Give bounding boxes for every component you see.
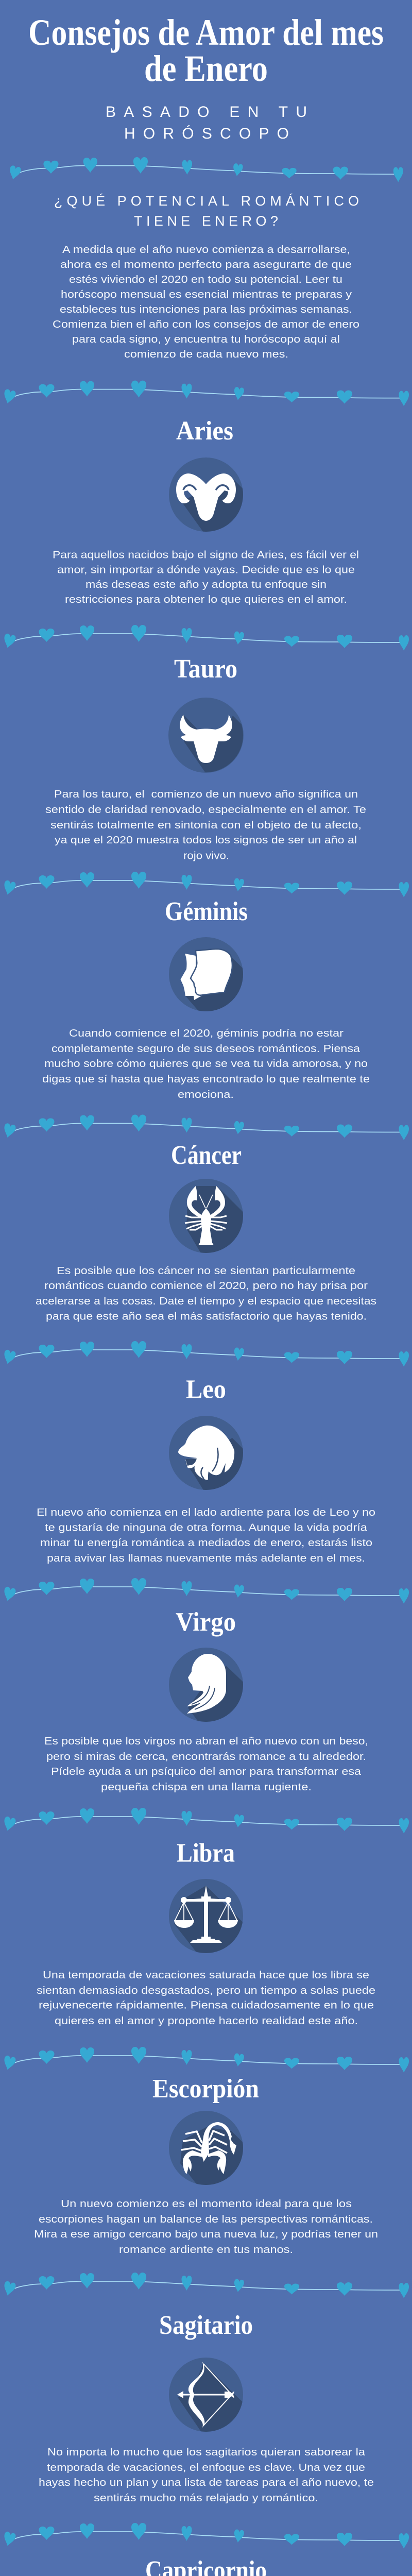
text block: Sagitario: temporada de vacaciones, el enfoque es clave. Una vez que xyxy=(47,2462,365,2473)
text block: Cáncer: acelerarse a las cosas. Date el tiempo y el espacio que necesitas xyxy=(36,1296,376,1307)
text block: Cáncer: románticos cuando comience el 2020, pero no hay prisa por xyxy=(44,1280,368,1292)
heading: Escorpión: Escorpión xyxy=(152,2074,259,2104)
text block: Tauro xyxy=(45,789,366,861)
divider: hearts xyxy=(2,2273,409,2298)
heading: Cáncer: Cáncer xyxy=(171,1141,242,1170)
text block: Aries: más deseas este año y adopta tu enfoque sin xyxy=(85,579,327,590)
divider: hearts xyxy=(2,1578,409,1604)
icon: scorpion xyxy=(169,2111,243,2185)
subtitle: HORÓSCOPO xyxy=(124,125,289,142)
heading: romantic potential xyxy=(54,193,359,229)
icon: ram xyxy=(169,457,243,532)
divider: hearts xyxy=(2,2047,409,2073)
text block: Escorpión xyxy=(34,2198,378,2256)
icon: bow and arrow xyxy=(169,2358,243,2432)
text block: Géminis xyxy=(42,1028,370,1100)
text block: Tauro: Para los tauro, el comienzo de un nuevo año significa un xyxy=(54,789,358,800)
heading: Tauro: Tauro xyxy=(174,654,237,684)
text block: introduction: Comienza bien el año con los consejos de amor de enero xyxy=(53,319,359,330)
panel: Virgo xyxy=(44,1607,368,1793)
text block: Cáncer: para que este año sea el más satisfactorio que hayas tenido. xyxy=(46,1311,367,1322)
divider: hearts xyxy=(2,2523,409,2549)
text block: Libra: Una temporada de vacaciones saturada hace que los libra se xyxy=(43,1970,369,1981)
text block: Tauro: ya que el 2020 muestra todos los signos de ser un año al xyxy=(55,835,357,846)
text block: Tauro: sentirás totalmente en sintonía con el objeto de tu afecto, xyxy=(50,820,362,831)
icon: lion xyxy=(169,1416,243,1490)
title: de Enero xyxy=(144,48,268,89)
text block: Sagitario: No importa lo mucho que los sagitarios quieran saborear la xyxy=(47,2447,366,2458)
text block: introduction: ahora es el momento perfecto para asegurarte de que xyxy=(60,259,352,270)
text block: Virgo: Pídele ayuda a un psíquico del amor para transformar esa xyxy=(51,1766,362,1777)
panel: introduction xyxy=(53,193,359,360)
icon: woman profile xyxy=(169,1648,243,1722)
divider: hearts xyxy=(2,1341,409,1367)
text block: Libra: rejuvenecerte rápidamente. Piensa cuidadosamente en lo que xyxy=(39,2000,374,2011)
text block: Géminis: mucho sobre cómo quieres que se vea tu vida amorosa, y no xyxy=(44,1058,368,1070)
text block: Aries: Para aquellos nacidos bajo el signo de Aries, es fácil ver el xyxy=(53,549,359,561)
heading: romantic potential: TIENE ENERO? xyxy=(134,213,278,229)
text block: Virgo: pero si miras de cerca, encontrarás romance a tu alrededor. xyxy=(46,1751,366,1762)
text block: introduction: estés viviendo el 2020 en todo su potencial. Leer tu xyxy=(69,274,342,285)
text block: introduction: A medida que el año nuevo comienza a desarrollarse, xyxy=(62,244,350,256)
heading: Leo: Leo xyxy=(186,1375,226,1404)
text block: Leo: minar tu energía romántica a mediados de enero, estarás listo xyxy=(40,1537,372,1549)
text block: Virgo: Es posible que los virgos no abran el año nuevo con un beso, xyxy=(44,1736,368,1747)
text block: Leo: El nuevo año comienza en el lado ardiente para los de Leo y no xyxy=(37,1507,375,1518)
text block: Virgo xyxy=(44,1736,368,1793)
text block: Escorpión: romance ardiente en tus manos. xyxy=(119,2244,293,2256)
panel: Escorpión xyxy=(34,2074,378,2256)
text block: Géminis: Cuando comience el 2020, géminis podría no estar xyxy=(69,1028,344,1039)
icon: bull xyxy=(168,698,244,773)
heading: Géminis: Géminis xyxy=(165,897,248,926)
panel: Géminis xyxy=(42,897,370,1100)
heading: Virgo: Virgo xyxy=(176,1607,236,1637)
heading: Aries: Aries xyxy=(176,416,233,446)
divider: hearts xyxy=(2,625,409,651)
text block: introduction: horóscopo mensual es esencial mientras te preparas y xyxy=(61,289,352,300)
divider: hearts xyxy=(2,1115,409,1141)
heading: romantic potential: ¿QUÉ POTENCIAL ROMÁNTICO xyxy=(54,193,359,209)
text block: introduction: comienzo de cada nuevo mes. xyxy=(124,349,288,360)
divider: hearts xyxy=(8,157,403,182)
text block: Tauro: rojo vivo. xyxy=(183,850,229,861)
text block: Libra: sientan demasiado desgastados, pero un tiempo a solas puede xyxy=(37,1985,375,1996)
text block: Libra xyxy=(37,1970,375,2027)
text block: Sagitario: hayas hecho un plan y una lista de tareas para el año nuevo, te xyxy=(39,2477,374,2488)
text block: introduction: estableces tus intenciones para las próximas semanas. xyxy=(60,304,352,315)
panel: Tauro xyxy=(45,654,366,861)
text block: Aries: amor, sin importar a dónde vayas. Decide que es lo que xyxy=(57,565,355,576)
text block: Escorpión: Mira a ese amigo cercano bajo una nueva luz, y podrías tener un xyxy=(34,2229,378,2240)
title xyxy=(28,12,384,89)
icon: twins xyxy=(169,937,243,1011)
panel: Sagitario xyxy=(39,2311,374,2504)
text block: Escorpión: Un nuevo comienzo es el momento ideal para que los xyxy=(61,2198,352,2210)
text block: Leo: para avivar las llamas nuevamente más adelante en el mes. xyxy=(47,1553,365,1564)
text block: Tauro: sentido de claridad renovado, especialmente en el amor. Te xyxy=(45,804,366,816)
text block: Géminis: digas que sí hasta que hayas encontrado lo que realmente te xyxy=(42,1074,370,1085)
text block: Sagitario: sentirás mucho más relajado y romántico. xyxy=(94,2493,318,2504)
text block: introduction: para cada signo, y encuentra tu horóscopo aquí al xyxy=(72,334,340,345)
text block: Virgo: pequeña chispa en una llama rugiente. xyxy=(101,1782,312,1793)
panel: Libra xyxy=(37,1838,375,2027)
text block: Cáncer: Es posible que los cáncer no se sientan particularmente xyxy=(57,1265,355,1277)
panel: Cáncer xyxy=(36,1141,376,1322)
text block: Escorpión: escorpiones hagan un balance de las perspectivas románticas. xyxy=(39,2214,373,2225)
panel: Leo xyxy=(37,1375,375,1564)
text block: Libra: quieres en el amor y proponte hacerlo realidad este año. xyxy=(55,2015,358,2027)
text block: introduction xyxy=(53,244,359,360)
divider: hearts xyxy=(2,1808,409,1834)
subtitle xyxy=(106,104,307,142)
subtitle: BASADO EN TU xyxy=(106,104,307,121)
text block: Géminis: completamente seguro de sus deseos románticos. Piensa xyxy=(52,1043,360,1055)
text block: Aries: restricciones para obtener lo que quieres en el amor. xyxy=(65,594,347,605)
heading: Sagitario: Sagitario xyxy=(159,2311,253,2340)
icon: scales xyxy=(169,1879,243,1953)
icon: crayfish xyxy=(169,1179,243,1253)
heading: Libra: Libra xyxy=(177,1838,235,1868)
text block: Géminis: emociona. xyxy=(178,1089,234,1100)
text block: Cáncer xyxy=(36,1265,376,1322)
divider: hearts xyxy=(2,381,409,406)
text block: Sagitario xyxy=(39,2447,374,2504)
panel: Aries xyxy=(53,416,359,605)
text block: Leo: te gustaría de ninguna de otra forma. Aunque la vida podría xyxy=(45,1522,368,1533)
text block: Aries xyxy=(53,549,359,605)
text block: Leo xyxy=(37,1507,375,1564)
divider: hearts xyxy=(2,872,409,897)
